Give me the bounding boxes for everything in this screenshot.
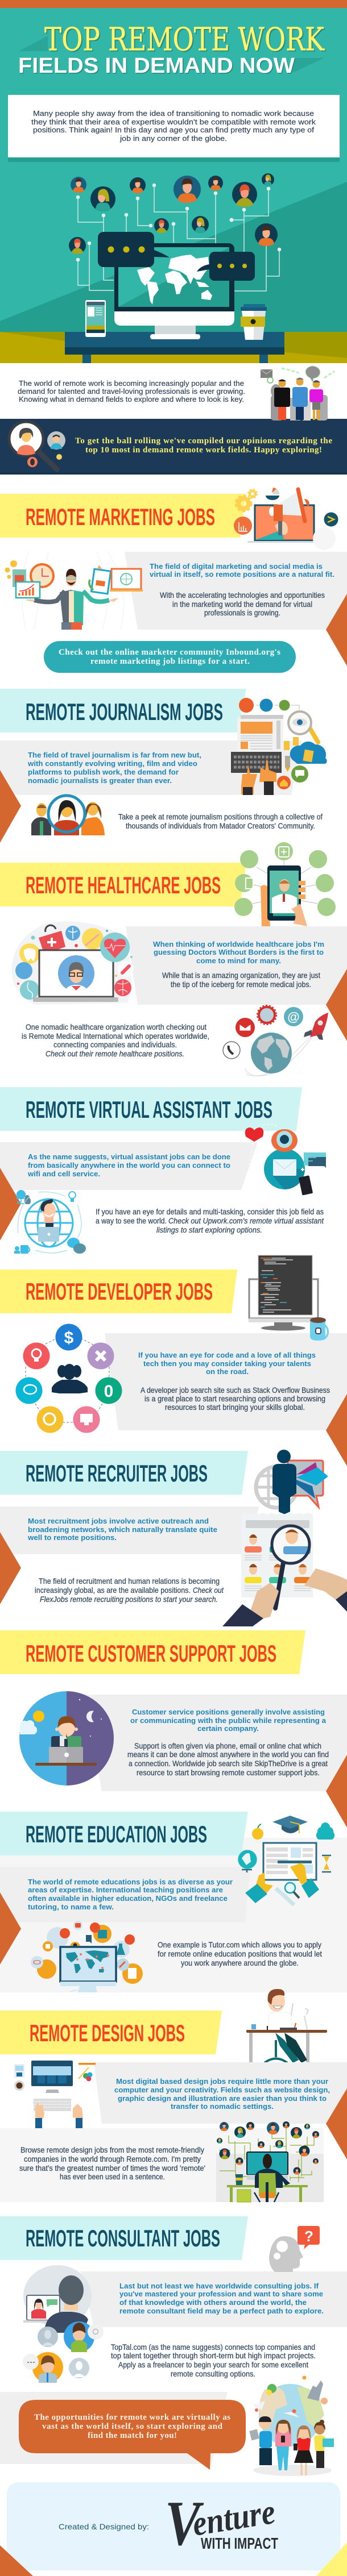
text block: top talent together through short-term but high impact projects.: [111, 2351, 316, 2360]
text panel: broadening networks, which naturally translate quite: [28, 1525, 217, 1534]
text panel: Customer service positions generally involve assisting: [132, 1708, 325, 1716]
text panel: professionals is growing.: [204, 608, 280, 617]
icon: team of professionals: [261, 366, 334, 421]
illustration: globe and rocket: [223, 1005, 328, 1076]
avatars network: [69, 173, 278, 254]
text panel: As the name suggests, virtual assistant jobs can be done: [28, 1152, 230, 1161]
text block: you've mastered your profession and want to share some: [119, 2290, 323, 2298]
chevron: [0, 1168, 21, 1241]
footer credits panel: [0, 2482, 347, 2576]
text panel: areas of expertise. International teaching positions are: [28, 1886, 223, 1894]
chevron: [326, 2088, 347, 2159]
coffee cup: [241, 304, 276, 340]
text block: remote consulting options.: [171, 2369, 255, 2378]
chevron: [0, 1532, 21, 1604]
text panel: platforms to publish work, the demand for: [28, 768, 179, 776]
text block: One example is Tutor.com which allows you to apply: [158, 1940, 321, 1949]
section: remote education jobs: [0, 1812, 347, 1992]
text panel: [0, 1867, 250, 1922]
illustration: online tutoring tablet: [238, 1816, 334, 1905]
section: remote journalism jobs: [0, 689, 327, 843]
text block: Browse remote design jobs from the most remote-friendly: [20, 2145, 204, 2154]
text block: for remote online education positions that would let: [158, 1949, 322, 1958]
text block: companies in the world through Remote.com. I'm pretty: [24, 2154, 201, 2163]
callout button: [44, 641, 296, 673]
closing speech bubble: find the match for you!: [88, 2431, 177, 2440]
illustration: world monitor and study icons: [31, 1921, 143, 1992]
text block: remote consultant field may be a perfect path to explore.: [119, 2307, 324, 2315]
text panel: [125, 552, 347, 630]
panel: intro statement: Knowing what in demand fields to explore and where to look is key.: [19, 395, 244, 403]
chevron: [326, 1755, 347, 1828]
text block: Check out their remote healthcare positions.: [46, 1049, 184, 1058]
illustration: eye, mail and chat: [245, 1124, 326, 1196]
speech bubbles: [98, 232, 255, 281]
panel: hero: [0, 8, 347, 363]
illustration: resume search: [222, 1513, 347, 1626]
heading banner: [0, 689, 246, 733]
text block: [19, 2145, 205, 2181]
illustration: code monitor and mug: [249, 1255, 328, 1341]
intro text box: they think that their area of expertise wouldn't be compatible with remote work: [31, 118, 316, 126]
icon: magnifier with avatars: [9, 422, 65, 469]
text block: [118, 812, 323, 830]
text block: you work anywhere around the globe.: [181, 1958, 299, 1967]
text panel: transfer to nomadic settings.: [171, 2102, 274, 2111]
logo: Venture with Impact: WITH IMPACT: [201, 2535, 278, 2552]
text panel: [94, 2062, 347, 2124]
text block: The field of recruitment and human relations is becoming: [39, 1576, 220, 1585]
icon: thinking head with question: [269, 2226, 320, 2272]
illustration: designer workspace from above: [14, 2061, 96, 2129]
text block: listings to start exploring options.: [156, 1225, 262, 1234]
illustration: virtual assistant on globe: [14, 1190, 86, 1254]
text block: a way to see the world.: [96, 1216, 167, 1225]
text block: [111, 2342, 316, 2378]
heading banner: [0, 1630, 305, 1674]
heading banner: REMOTE RECRUITER JOBS: [26, 1460, 208, 1487]
illustration: recruiter and globe: [256, 1450, 328, 1514]
text panel: well to remote positions.: [27, 1533, 117, 1542]
monitor with world map: [114, 243, 234, 339]
text block: sure that's the greatest number of times the word 'remote': [19, 2163, 205, 2173]
logo: Venture with Impact: V: [165, 2488, 204, 2559]
panel: intro statement: The world of remote work is becoming increasingly popular and the: [19, 379, 244, 388]
illustration: skills icon ring: 0: [104, 1382, 113, 1401]
illustration: day and night support agent: [19, 1691, 114, 1786]
text block: Last but not least we have worldwide consulting jobs. If: [119, 2282, 319, 2290]
text panel: a connection. Worldwide job search site SkipTheDrive is a great: [129, 1759, 328, 1768]
text block: is Remote Medical International which operates worldwide,: [22, 1031, 209, 1041]
icon: laptop megaphone: [234, 488, 338, 550]
text block: Check out: [193, 1585, 224, 1595]
text block: thousands of individuals from Matador Creators' Community.: [126, 821, 315, 830]
panel: intro statement: [18, 379, 245, 403]
chevron: [0, 770, 21, 843]
title: FIELDS IN DEMAND NOW: [19, 55, 296, 78]
text panel: The field of travel journalism is far from new but,: [28, 751, 201, 759]
text block: Apply as a freelancer to begin your search for some excellent: [118, 2360, 308, 2369]
heading banner: [0, 1087, 302, 1131]
intro text box: job in any corner of the globe.: [119, 134, 227, 143]
intro text box: [8, 95, 340, 162]
intro text box: Many people shy away from the idea of transitioning to nomadic work because: [33, 109, 314, 118]
text panel: nomadic journalists is greater than ever.: [28, 776, 172, 785]
section: remote design jobs: [0, 1989, 347, 2202]
heading banner: REMOTE DEVELOPER JOBS: [26, 1278, 213, 1305]
illustration: skills icon ring: $: [64, 1329, 74, 1347]
closing speech bubble: The opportunities for remote work are virtually as: [34, 2413, 230, 2422]
ground and desk: [0, 332, 347, 363]
text panel: wifi and cell service.: [27, 1170, 100, 1178]
text panel: from basically anywhere in the world you can connect to: [28, 1161, 230, 1170]
text block: connecting companies and individuals.: [53, 1040, 177, 1049]
callout button: Check out the online marketer community Inbound.org's: [59, 648, 280, 657]
heading banner: REMOTE DESIGN JOBS: [30, 2020, 185, 2046]
text panel: [0, 1507, 259, 1554]
illustration: designer at desk: [246, 1989, 327, 2063]
light text panel: [0, 2128, 324, 2202]
section: remote marketing jobs: [0, 488, 347, 673]
illustration: doctor on laptop with medical icons: [11, 921, 134, 1005]
text block: [22, 1022, 209, 1058]
text block: [35, 1576, 224, 1604]
text block: of that knowledge with others around the world, the: [119, 2298, 307, 2307]
corner triangles: [0, 2542, 347, 2576]
illustration: video consultation: [23, 2265, 104, 2383]
text panel: [84, 1695, 347, 1791]
text panel: resource to start browsing remote customer support jobs.: [137, 1768, 320, 1777]
section: remote virtual assistant jobs: [0, 1087, 326, 1254]
text panel: with constantly evolving writing, film and video: [27, 759, 197, 768]
text panel: is a great place to start researching options and browsing: [144, 1394, 325, 1403]
heading banner: REMOTE EDUCATION JOBS: [26, 1821, 207, 1847]
text panel: When thinking of worldwide healthcare jobs I'm: [153, 940, 324, 948]
text panel: [0, 740, 301, 795]
text panel: The field of digital marketing and social media is: [150, 562, 323, 571]
illustration: telehealth phone: [234, 842, 336, 926]
icon: thinking head with question: ?: [304, 2228, 313, 2245]
callout button: remote marketing job listings for a start.: [90, 657, 250, 666]
heading banner: [0, 2011, 222, 2054]
chevron: [0, 1892, 21, 1965]
text panel: With the accelerating technologies and opportunities: [160, 590, 325, 600]
text panel: virtual in itself, so remote positions are a natural fit.: [150, 570, 334, 579]
closing speech bubble: vast as the world itself, so start exploring and: [42, 2422, 223, 2431]
chevron: [326, 969, 347, 1041]
text block: FlexJobs remote recruiting positions to start your search.: [40, 1595, 218, 1604]
text block: If you have an eye for details and multi-tasking, consider this job field as: [96, 1207, 324, 1216]
illustration: journalists with focus ring: [31, 796, 105, 835]
illustration: remote worker network: [216, 2121, 324, 2202]
heading banner: [0, 2216, 248, 2260]
text block: Take a peek at remote journalism positions through a collective of: [118, 812, 323, 821]
text panel: Most digital based design jobs require little more than your: [116, 2077, 328, 2086]
text panel: in the marketing world the demand for virtual: [172, 600, 312, 609]
text panel: resources to start bringing your skills global.: [165, 1403, 305, 1412]
text block: increasingly global, as are the available positions.: [35, 1585, 191, 1595]
section: remote healthcare jobs: [0, 842, 347, 1076]
text panel: graphic design and illustration are easier than you think to: [118, 2094, 327, 2103]
text block: TopTal.com (as the name suggests) connects top companies and: [111, 2342, 315, 2352]
banner: get the ball rolling: To get the ball rolling we've compiled our opinions regarding the: [75, 436, 332, 446]
text panel: [81, 2271, 347, 2327]
text panel: computer and your creativity. Fields such as website design,: [114, 2086, 330, 2094]
text block: [119, 2282, 324, 2315]
header accent bar: [0, 0, 347, 8]
panel: intro statement: demand for talented and travel-loving professionals is ever growing.: [18, 387, 245, 396]
illustration: travelers and world: [249, 2375, 334, 2476]
text block: [158, 1940, 322, 1967]
intro text box: positions. Think again! In this day and age you can find pretty much any type of: [33, 126, 314, 134]
text block: One nomadic healthcare organization worth checking out: [26, 1022, 206, 1031]
text panel: The world of remote educations jobs is as diverse as your: [28, 1878, 233, 1886]
section: remote developer jobs: [0, 1255, 347, 1466]
text panel: tech then you may consider taking your talents: [143, 1359, 311, 1368]
text panel: come to mind for many.: [196, 956, 281, 965]
light background panel: [0, 1838, 347, 1992]
section: remote recruiter jobs: [0, 1450, 347, 1626]
chevron: [326, 594, 347, 666]
text panel: [126, 926, 347, 1005]
logo: Venture with Impact: enture: [190, 2492, 278, 2544]
section: remote consultant jobs: [0, 2216, 347, 2383]
text panel: tutoring, to name a few.: [28, 1903, 114, 1911]
logo: Venture with Impact: [165, 2488, 278, 2559]
credit text: Created & Designed by:: [59, 2522, 149, 2531]
text panel: [105, 1333, 347, 1430]
text panel: Support is often given via phone, email or online chat which: [134, 1741, 321, 1750]
closing speech bubble: [19, 2400, 246, 2470]
illustration: marketer juggling devices: [5, 552, 143, 630]
text panel: Most recruitment jobs involve active outreach and: [28, 1517, 209, 1525]
illustration: skills icon ring: [16, 1324, 122, 1433]
heading banner: [0, 1270, 237, 1313]
heading banner: [0, 1812, 248, 1855]
text block: Check out Upwork.com's remote virtual assistant: [168, 1216, 324, 1225]
text block: has ever been used in a sentence.: [60, 2172, 165, 2181]
heading banner: [0, 863, 246, 906]
phone: [85, 300, 106, 337]
title: FIELDS IN DEMAND NOW: [18, 54, 295, 78]
heading banner: [0, 494, 246, 538]
banner: get the ball rolling: [0, 419, 347, 475]
section: remote customer support jobs: [0, 1630, 347, 1828]
text panel: certain company.: [197, 1724, 259, 1733]
text panel: or communicating with the public while representing a: [130, 1716, 327, 1725]
text block: [96, 1207, 324, 1234]
banner: get the ball rolling: top 10 most in demand remote work fields. Happy exploring!: [85, 446, 322, 455]
heading banner: [0, 1451, 248, 1495]
closing panel backdrop: [0, 2392, 228, 2464]
chevron: [326, 1394, 347, 1466]
illustration: globe and rocket: @: [287, 1010, 300, 1024]
text panel: guessing Doctors Without Borders is the first to: [154, 948, 324, 956]
heading banner: REMOTE MARKETING JOBS: [26, 503, 215, 530]
text panel: on the road.: [206, 1367, 249, 1376]
text panel: often available in higher education, NGOs and freelance: [28, 1894, 228, 1903]
network connector lines: [76, 184, 281, 291]
text panel: the tip of the iceberg for remote medical jobs.: [171, 980, 311, 989]
text panel: [0, 1142, 258, 1190]
text panel: If you have an eye for code and a love of all things: [138, 1351, 316, 1359]
title: [18, 22, 326, 78]
illustration: writing on keyboard: [231, 698, 327, 795]
text panel: While that is an amazing organization, they are just: [162, 971, 320, 980]
